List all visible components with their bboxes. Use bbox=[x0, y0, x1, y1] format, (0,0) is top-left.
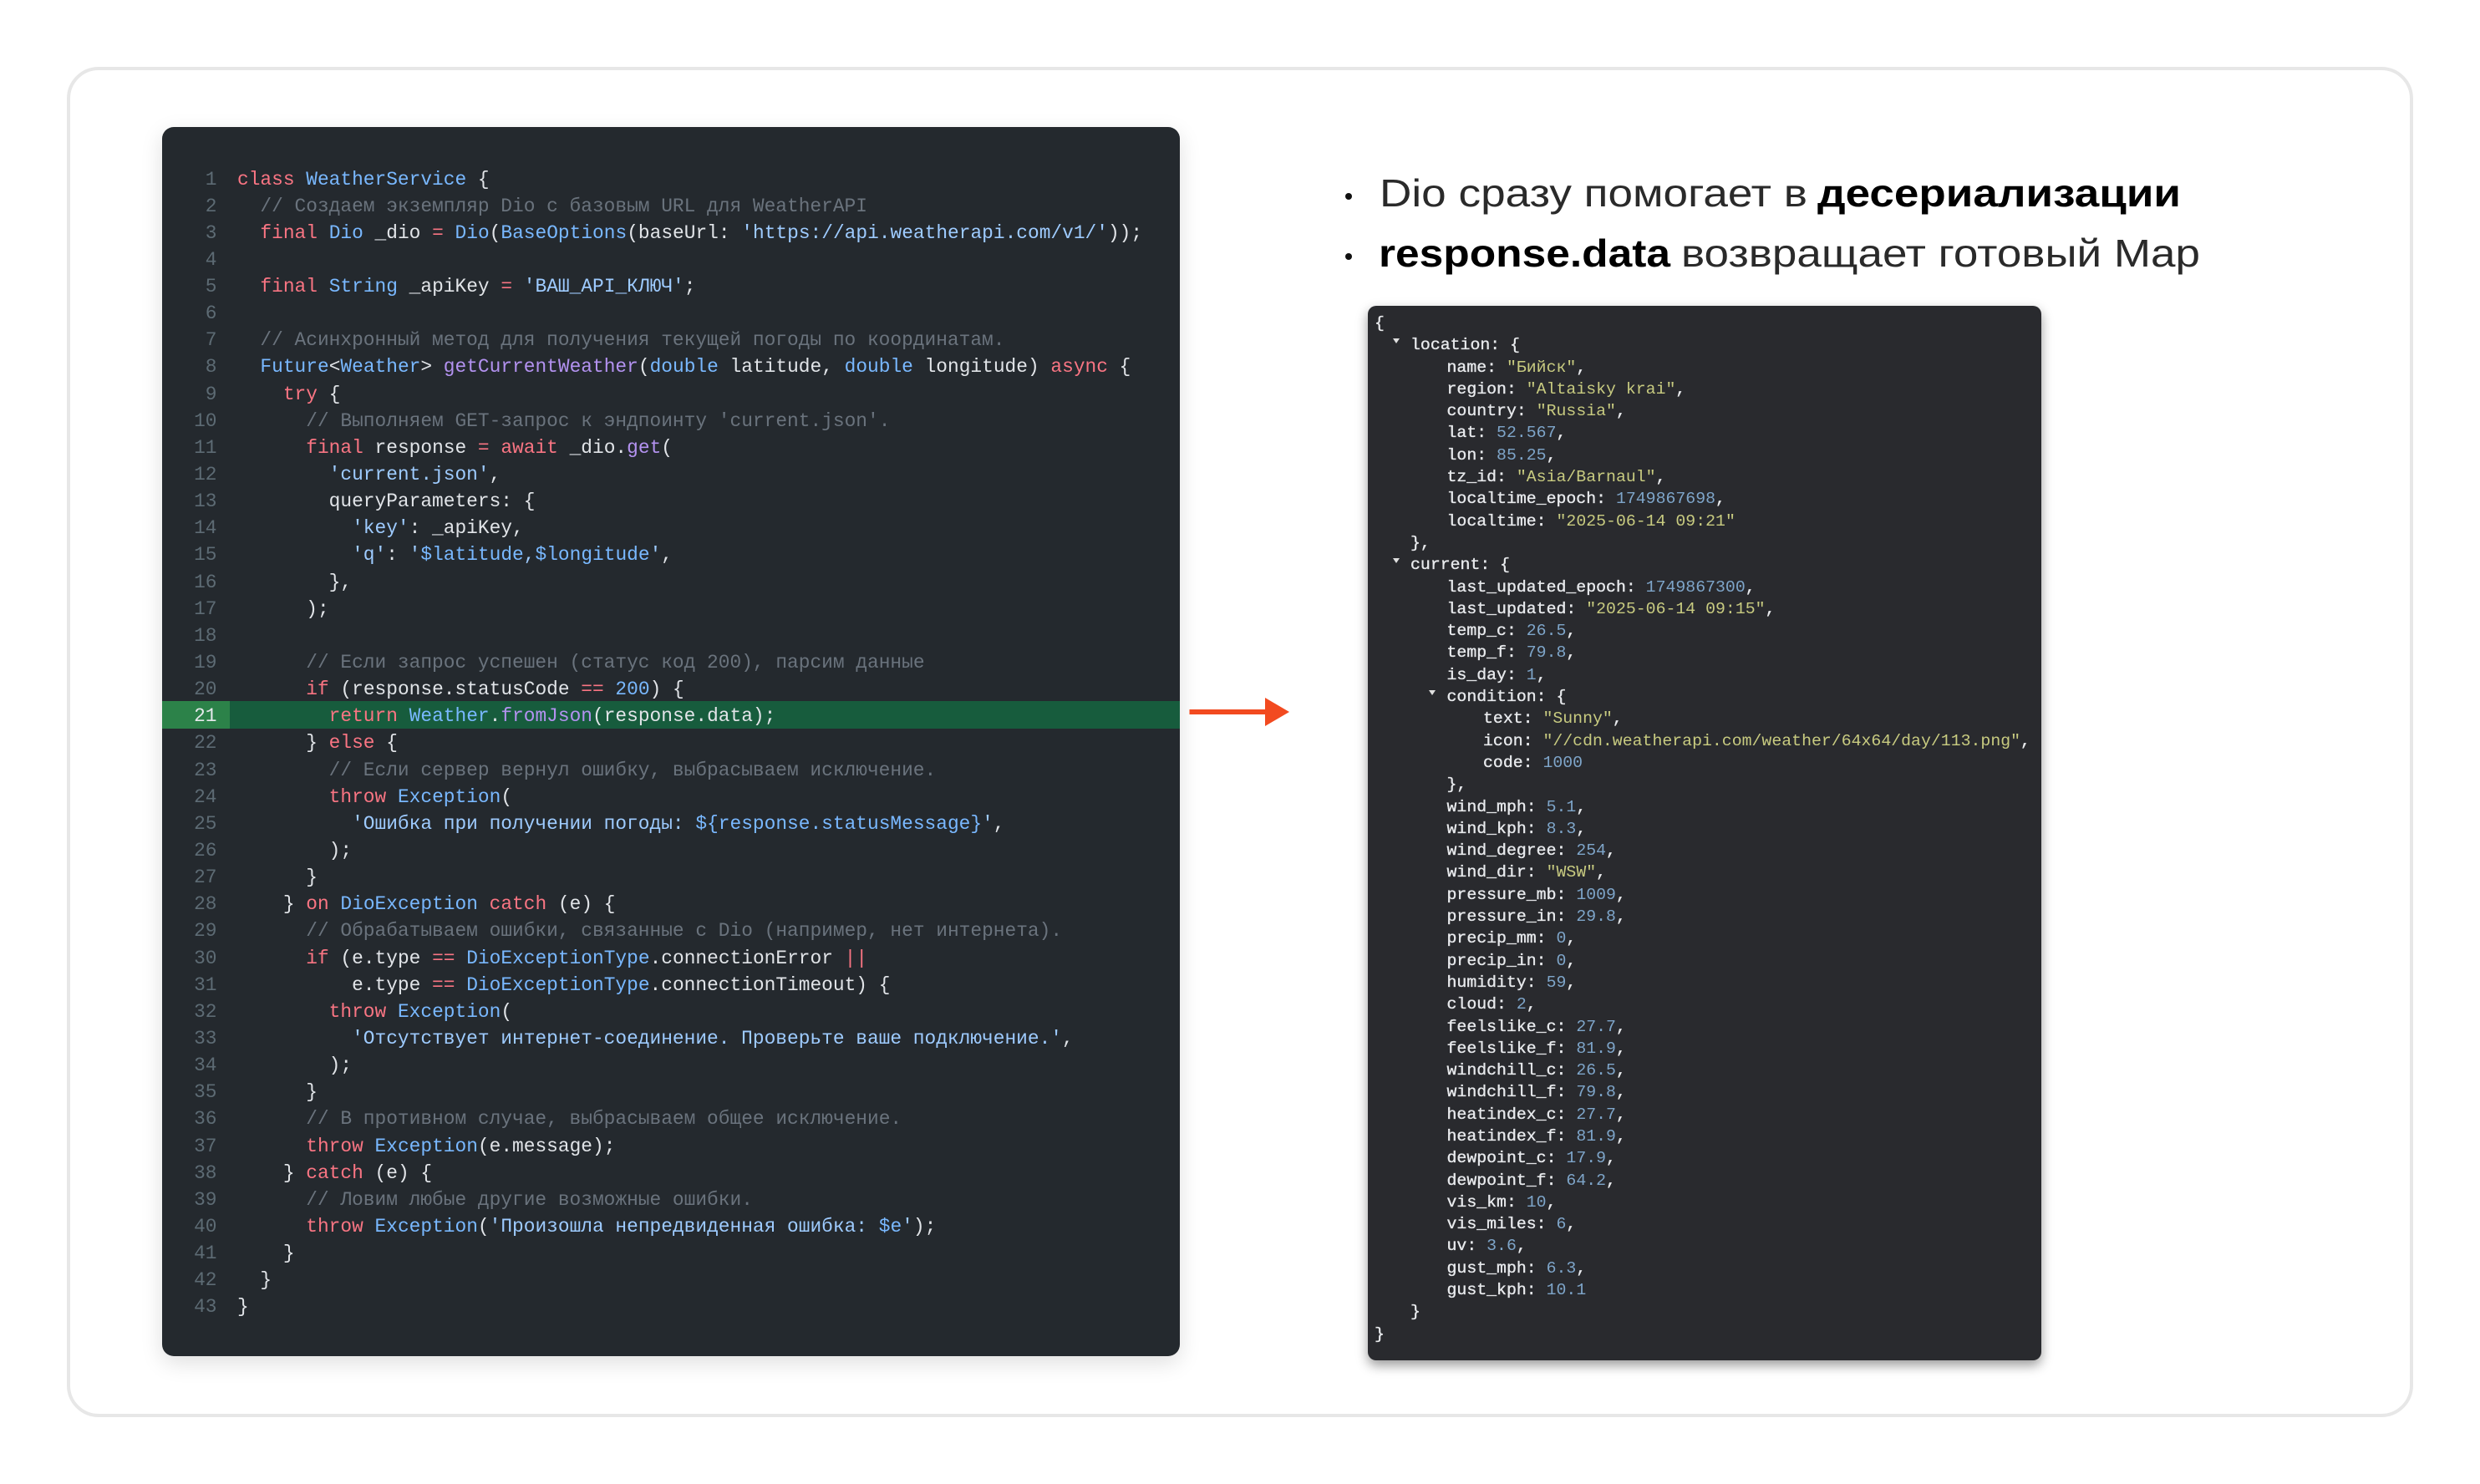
JSON text: feelslike_c: 27.7, bbox=[1447, 1016, 1626, 1036]
JSON text: vis_miles: 6, bbox=[1447, 1214, 1576, 1233]
JSON text bbox=[1375, 313, 2030, 1344]
bullet 2: response.data bbox=[1379, 231, 1670, 275]
JSON text: humidity: 59, bbox=[1447, 973, 1576, 992]
JSON text: lat: 52.567, bbox=[1447, 423, 1566, 442]
highlighted line 21 bbox=[230, 701, 1180, 729]
JSON text: cloud: 2, bbox=[1447, 994, 1537, 1014]
icon: current disclosure triangle bbox=[1393, 558, 1400, 563]
bullet 1 bbox=[1345, 171, 2181, 215]
icon: location disclosure triangle bbox=[1393, 338, 1400, 343]
JSON text: dewpoint_c: 17.9, bbox=[1447, 1148, 1616, 1167]
JSON text: dewpoint_f: 64.2, bbox=[1447, 1171, 1616, 1190]
JSON text: location: { bbox=[1410, 335, 1520, 354]
bullet 2 bbox=[1345, 231, 2200, 275]
JSON text: wind_degree: 254, bbox=[1447, 841, 1616, 860]
JSON text: vis_km: 10, bbox=[1447, 1192, 1557, 1212]
JSON text: heatindex_f: 81.9, bbox=[1447, 1126, 1626, 1146]
panel: JSON response bbox=[1368, 306, 2041, 1360]
JSON text: condition: { bbox=[1447, 687, 1566, 706]
line numbers: 1 2 3 4 5 6 7 8 9 10 11 12 13 14 15 16 17 18 19 20 21 22 23 24 25 26 27 28 29 30 31 32 33 34 35 36 37 38 39 40 41 42 43 bbox=[194, 169, 217, 1318]
JSON text: pressure_mb: 1009, bbox=[1447, 885, 1626, 904]
JSON text: name: "Бийск", bbox=[1447, 358, 1586, 377]
JSON text: gust_mph: 6.3, bbox=[1447, 1258, 1586, 1278]
JSON text: wind_mph: 5.1, bbox=[1447, 797, 1586, 816]
JSON text: region: "Altaisky krai", bbox=[1447, 379, 1685, 399]
JSON text: wind_dir: "WSW", bbox=[1447, 862, 1606, 882]
bullet points text bbox=[1345, 171, 2200, 275]
icon: condition disclosure triangle bbox=[1429, 690, 1436, 695]
bullet 1: десериализации bbox=[1817, 171, 2181, 215]
JSON text: tz_id: "Asia/Barnaul", bbox=[1447, 467, 1666, 486]
JSON text: text: "Sunny", bbox=[1483, 709, 1623, 728]
JSON text: icon: "//cdn.weatherapi.com/weather/64x64/day/113.png", bbox=[1483, 731, 2030, 750]
bullet 1: Dio сразу помогает в bbox=[1380, 171, 1807, 215]
JSON text: localtime_epoch: 1749867698, bbox=[1447, 489, 1725, 508]
JSON text: is_day: 1, bbox=[1447, 665, 1547, 684]
JSON text: localtime: "2025-06-14 09:21" bbox=[1447, 511, 1735, 531]
highlighted line gutter bbox=[162, 701, 230, 729]
JSON text: } bbox=[1375, 1324, 1385, 1344]
JSON text: windchill_f: 79.8, bbox=[1447, 1082, 1626, 1101]
bullet 2: возвращает готовый Map bbox=[1681, 231, 2200, 275]
JSON text: current: { bbox=[1410, 555, 1510, 574]
JSON text: heatindex_c: 27.7, bbox=[1447, 1105, 1626, 1124]
JSON text: { bbox=[1375, 313, 1385, 333]
JSON text: country: "Russia", bbox=[1447, 401, 1626, 420]
JSON text: }, bbox=[1410, 533, 1431, 552]
JSON text: last_updated: "2025-06-14 09:15", bbox=[1447, 599, 1775, 618]
JSON text: feelslike_f: 81.9, bbox=[1447, 1039, 1626, 1058]
JSON text: code: 1000 bbox=[1483, 753, 1583, 772]
JSON text: } bbox=[1410, 1302, 1420, 1321]
JSON text: uv: 3.6, bbox=[1447, 1236, 1527, 1255]
code text: WeatherService class: class WeatherService { // Создаем экземпляр Dio с базовым URL для WeatherAPI final Dio _dio = Dio(BaseOptions(baseUrl: 'https://api.weatherapi.com/v1/')); final String _apiKey = 'ВАШ_API_КЛЮЧ'; // Асинхронный метод для получения текущей погоды по координатам. Future<Weather> getCurrentWeather(double latitude, double longitude) async { try { // Выполняем GET-запрос к эндпоинту 'current.json'. final response = await _dio.get( 'current.json', queryParameters: { 'key': _apiKey, 'q': '$latitude,$longitude', }, ); // Если запрос успешен (статус код 200), парсим данные if (response.statusCode == 200) { return Weather.fromJson(response.data); } else { // Если сервер вернул ошибку, выбрасываем исключение. throw Exception( 'Ошибка при получении погоды: ${response.statusMessage}', ); } } on DioException catch (e) { // Обрабатываем ошибки, связанные с Dio (например, нет интернета). if (e.type == DioExceptionType.connectionError || e.type == DioExceptionType.connectionTimeout) { throw Exception( 'Отсутствует интернет-соединение. Проверьте ваше подключение.', ); } // В противном случае, выбрасываем общее исключение. throw Exception(e.message); } catch (e) { // Ловим любые другие возможные ошибки. throw Exception('Произошла непредвиденная ошибка: $e'); } } } bbox=[237, 169, 1142, 1318]
JSON text: }, bbox=[1447, 775, 1466, 794]
JSON text: pressure_in: 29.8, bbox=[1447, 907, 1626, 926]
JSON text: precip_mm: 0, bbox=[1447, 928, 1576, 948]
panel: code editor bbox=[162, 127, 1180, 1356]
JSON text: lon: 85.25, bbox=[1447, 445, 1557, 465]
JSON text: temp_c: 26.5, bbox=[1447, 621, 1576, 640]
JSON text: precip_in: 0, bbox=[1447, 951, 1576, 970]
JSON text: gust_kph: 10.1 bbox=[1447, 1280, 1586, 1299]
JSON text: last_updated_epoch: 1749867300, bbox=[1447, 577, 1756, 597]
JSON text: temp_f: 79.8, bbox=[1447, 643, 1576, 662]
JSON text: wind_kph: 8.3, bbox=[1447, 819, 1586, 838]
JSON text: windchill_c: 26.5, bbox=[1447, 1060, 1626, 1080]
arrow: code to bullet points bbox=[1190, 698, 1289, 726]
